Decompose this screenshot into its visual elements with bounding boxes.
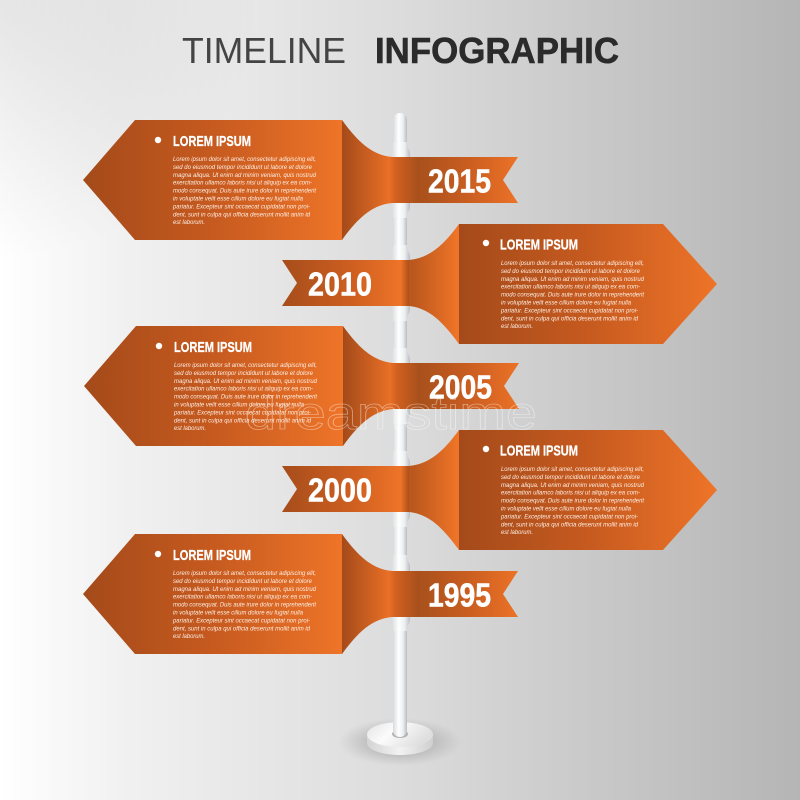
body text: dent, sunt in culpa qui officia deserunt mollit anim id bbox=[173, 211, 310, 218]
heading: LOREM IPSUM bbox=[173, 547, 251, 564]
body text: in voluptate velit esse cillum dolore eu fugiat nulla bbox=[501, 506, 631, 512]
body text: Lorem ipsum dolor sit amet, consectetur adipiscing elit, bbox=[501, 260, 644, 267]
body text: magna aliqua. Ut enim ad minim veniam, quis nostrud bbox=[174, 378, 317, 385]
body text: in voluptate velit esse cillum dolore eu fugiat nulla bbox=[173, 196, 303, 202]
flag 1995 bbox=[83, 534, 518, 654]
body text: sed do eiusmod tempor incididunt ut labore et dolore bbox=[501, 474, 640, 481]
year 2010: 2010 bbox=[308, 266, 372, 302]
body text: pariatur. Excepteur sint occaecat cupidatat non proi- bbox=[172, 617, 310, 624]
body text: exercitation ullamco laboris nisi ut aliquip ex ea com- bbox=[501, 490, 640, 497]
body text: exercitation ullamco laboris nisi ut aliquip ex ea com- bbox=[501, 284, 640, 291]
body text bbox=[173, 362, 317, 432]
heading: LOREM IPSUM bbox=[173, 133, 251, 150]
heading: LOREM IPSUM bbox=[500, 442, 578, 460]
body text: est laborum. bbox=[173, 219, 205, 226]
body text: pariatur. Excepteur sint occaecat cupidatat non proi- bbox=[500, 307, 638, 314]
year 2005: 2005 bbox=[429, 368, 492, 406]
body text: pariatur. Excepteur sint occaecat cupidatat non proi- bbox=[500, 513, 638, 520]
body text: est laborum. bbox=[501, 323, 533, 330]
heading: LOREM IPSUM bbox=[174, 339, 252, 356]
title: TIMELINE bbox=[182, 30, 346, 71]
body text: magna aliqua. Ut enim ad minim veniam, quis nostrud bbox=[501, 482, 644, 489]
body text: pariatur. Excepteur sint occaecat cupidatat non proi- bbox=[172, 203, 310, 210]
title: INFOGRAPHIC bbox=[375, 30, 619, 71]
flag 2005 bbox=[84, 326, 519, 446]
body text: sed do eiusmod tempor incididunt ut labore et dolore bbox=[173, 164, 312, 171]
body text: in voluptate velit esse cillum dolore eu fugiat nulla bbox=[501, 300, 631, 306]
body text: modo consequat. Duis aute irure dolor in reprehenderit bbox=[501, 498, 644, 505]
body text bbox=[500, 260, 644, 330]
year 2015: 2015 bbox=[428, 162, 491, 200]
flag 2000 bbox=[282, 430, 717, 550]
body text: est laborum. bbox=[174, 425, 206, 432]
body text: modo consequat. Duis aute irure dolor in reprehenderit bbox=[501, 292, 644, 299]
flag 2010 bbox=[282, 224, 717, 344]
body text: in voluptate velit esse cillum dolore eu fugiat nulla bbox=[174, 402, 304, 408]
body text: sed do eiusmod tempor incididunt ut labore et dolore bbox=[173, 578, 312, 585]
signpost pole with base bbox=[338, 113, 462, 766]
body text bbox=[172, 156, 316, 226]
body text: sed do eiusmod tempor incididunt ut labore et dolore bbox=[501, 268, 640, 275]
watermark: dreamstime bbox=[245, 387, 537, 439]
body text bbox=[172, 570, 316, 640]
title bbox=[182, 30, 619, 71]
bullet bbox=[156, 343, 162, 349]
body text: magna aliqua. Ut enim ad minim veniam, quis nostrud bbox=[501, 276, 644, 283]
body text: exercitation ullamco laboris nisi ut aliquip ex ea com- bbox=[173, 180, 312, 187]
body text: Lorem ipsum dolor sit amet, consectetur adipiscing elit, bbox=[174, 362, 317, 369]
bullet bbox=[155, 551, 161, 557]
body text: pariatur. Excepteur sint occaecat cupidatat non proi- bbox=[173, 409, 311, 416]
bullet bbox=[483, 446, 489, 452]
year 2000: 2000 bbox=[308, 472, 372, 508]
body text: in voluptate velit esse cillum dolore eu fugiat nulla bbox=[173, 610, 303, 616]
body text: dent, sunt in culpa qui officia deserunt mollit anim id bbox=[173, 625, 310, 632]
body text: magna aliqua. Ut enim ad minim veniam, quis nostrud bbox=[173, 586, 316, 593]
body text: modo consequat. Duis aute irure dolor in reprehenderit bbox=[173, 188, 316, 195]
body text: dent, sunt in culpa qui officia deserunt mollit anim id bbox=[174, 417, 311, 424]
body text: est laborum. bbox=[501, 529, 533, 536]
bullet bbox=[483, 240, 489, 246]
flag 2015 bbox=[83, 120, 518, 240]
body text: dent, sunt in culpa qui officia deserunt mollit anim id bbox=[501, 521, 638, 528]
body text: modo consequat. Duis aute irure dolor in reprehenderit bbox=[173, 602, 316, 609]
heading: LOREM IPSUM bbox=[500, 236, 578, 254]
body text: est laborum. bbox=[173, 633, 205, 640]
body text: Lorem ipsum dolor sit amet, consectetur adipiscing elit, bbox=[173, 570, 316, 577]
body text: Lorem ipsum dolor sit amet, consectetur adipiscing elit, bbox=[501, 466, 644, 473]
body text: Lorem ipsum dolor sit amet, consectetur adipiscing elit, bbox=[173, 156, 316, 163]
body text: sed do eiusmod tempor incididunt ut labore et dolore bbox=[174, 370, 313, 377]
body text: modo consequat. Duis aute irure dolor in reprehenderit bbox=[174, 394, 317, 401]
body text: magna aliqua. Ut enim ad minim veniam, quis nostrud bbox=[173, 172, 316, 179]
body text: exercitation ullamco laboris nisi ut aliquip ex ea com- bbox=[173, 594, 312, 601]
body text: dent, sunt in culpa qui officia deserunt mollit anim id bbox=[501, 315, 638, 322]
body text bbox=[500, 466, 644, 536]
year 1995: 1995 bbox=[428, 576, 491, 614]
bullet bbox=[155, 137, 161, 143]
body text: exercitation ullamco laboris nisi ut aliquip ex ea com- bbox=[174, 386, 313, 393]
